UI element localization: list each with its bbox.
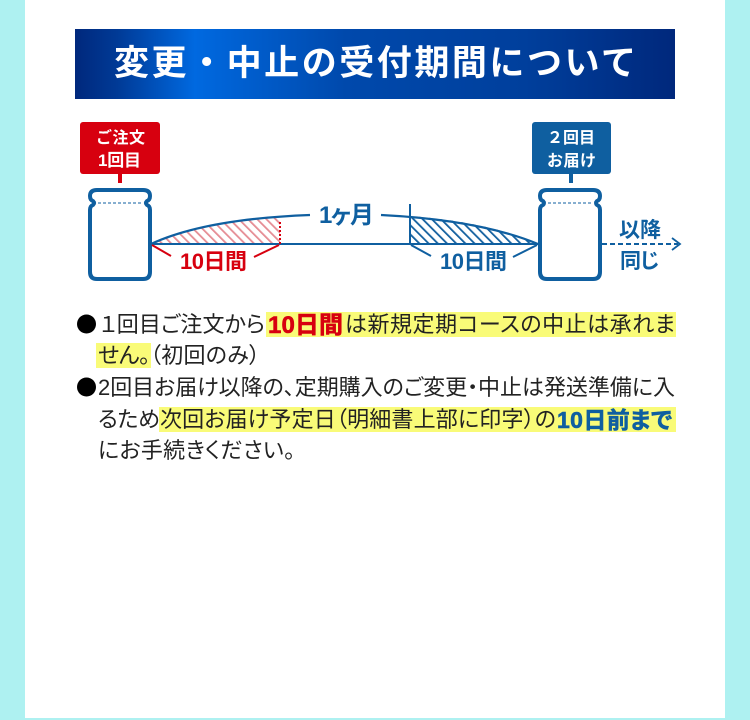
label: red 10 days bbox=[152, 245, 279, 274]
note 2: 次回お届け予定日（明細書上部に印字）の bbox=[160, 407, 556, 432]
text: same from next onward bbox=[619, 219, 661, 273]
note 1: （初回のみ） bbox=[150, 343, 260, 368]
note 2 bbox=[77, 375, 676, 463]
note 1: 10日間 bbox=[268, 312, 343, 339]
label: first order bbox=[80, 122, 160, 183]
note 2: 2回目お届け以降の、定期購入のご変更・中止は発送準備に入 bbox=[98, 375, 675, 400]
note 1 bbox=[77, 312, 676, 368]
label: first order: 1回目 bbox=[98, 151, 141, 170]
icon: first bottle bbox=[90, 190, 150, 279]
label: blue 10 days bbox=[411, 245, 537, 274]
note 2: 10日前まで bbox=[557, 407, 672, 433]
label: first order: ご注文 bbox=[96, 128, 145, 147]
text: same from next onward: 以降 bbox=[619, 219, 661, 242]
title banner: 変更・中止の受付期間について bbox=[114, 44, 636, 83]
text: same from next onward: 同じ bbox=[620, 250, 660, 273]
label: second delivery: ２回目 bbox=[547, 130, 595, 147]
note 1: １回目ご注文から bbox=[100, 312, 265, 337]
arrow: onward deliveries bbox=[602, 238, 680, 250]
label: second delivery bbox=[532, 122, 611, 183]
label: red 10 days: 10日間 bbox=[180, 249, 247, 274]
label: blue 10 days: 10日間 bbox=[440, 249, 507, 274]
icon: second bottle bbox=[540, 190, 600, 279]
marker: red dashed end of 10 days bbox=[279, 222, 281, 244]
note 2: るため bbox=[98, 407, 160, 432]
note 2: にお手続きください。 bbox=[98, 438, 295, 463]
title banner bbox=[75, 29, 675, 99]
diagram: delivery timeline bbox=[80, 122, 680, 279]
text: one month: 1ヶ月 bbox=[319, 202, 374, 229]
timeline arc and baseline bbox=[151, 204, 538, 244]
note 1: は新規定期コースの中止は承れま bbox=[345, 312, 675, 337]
hatched area: first 10 days bbox=[151, 217, 280, 244]
hatched area: last 10 days bbox=[410, 216, 538, 244]
note list bbox=[77, 312, 676, 463]
label: second delivery: お届け bbox=[547, 152, 596, 170]
note 1: せん。 bbox=[98, 343, 150, 368]
